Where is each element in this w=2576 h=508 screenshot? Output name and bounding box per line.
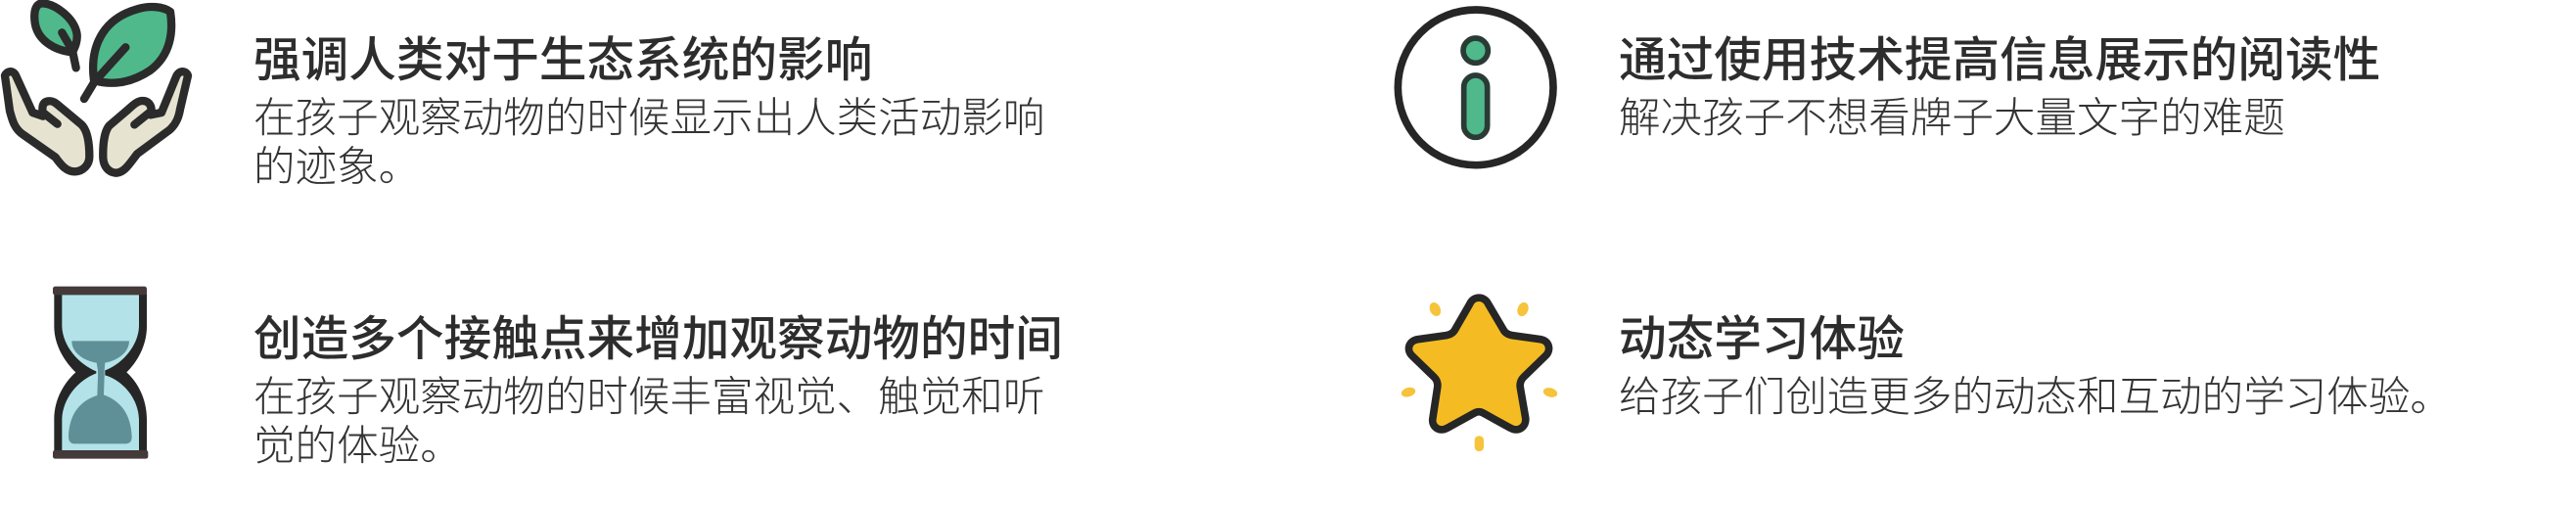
icon: information	[1394, 6, 1557, 168]
text block: touchpoints	[253, 313, 1063, 470]
text block: readability: 通过使用技术提高信息展示的阅读性	[1619, 34, 2380, 87]
icon: hourglass	[53, 286, 149, 459]
icon: hands holding leaves	[0, 0, 192, 177]
text block: human impact: 的迹象。	[253, 144, 420, 191]
text block: dynamic learning: 给孩子们创造更多的动态和互动的学习体验。	[1619, 374, 2452, 421]
text block: human impact: 强调人类对于生态系统的影响	[253, 34, 872, 87]
text block: readability	[1619, 34, 2380, 142]
text block: dynamic learning: 动态学习体验	[1619, 313, 1905, 366]
text block: readability: 解决孩子不想看牌子大量文字的难题	[1619, 95, 2285, 142]
text block: touchpoints: 觉的体验。	[253, 423, 462, 470]
text block: dynamic learning	[1619, 313, 2452, 421]
text block: touchpoints: 在孩子观察动物的时候丰富视觉、触觉和听	[253, 374, 1044, 421]
text block: touchpoints: 创造多个接触点来增加观察动物的时间	[253, 313, 1063, 366]
text block: human impact: 在孩子观察动物的时候显示出人类活动影响	[253, 95, 1044, 142]
icon: star	[1402, 294, 1558, 451]
text block: human impact	[253, 34, 1044, 191]
